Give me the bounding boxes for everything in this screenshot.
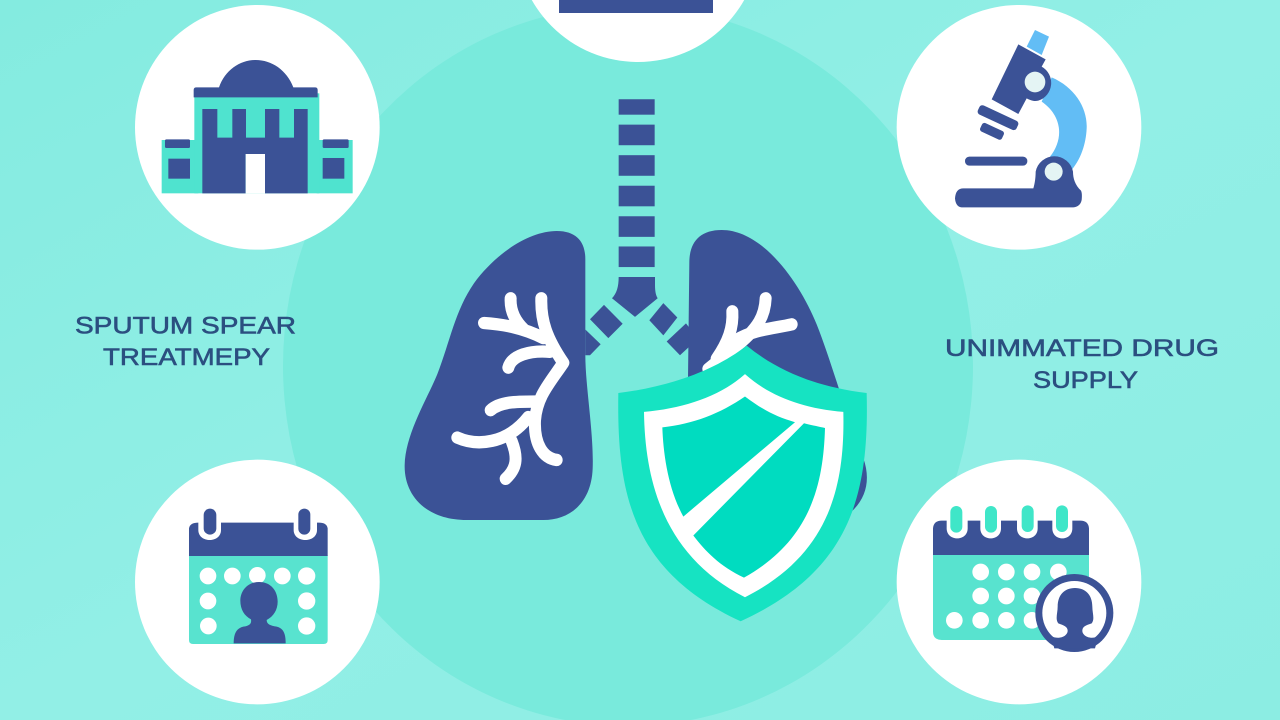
label: right: UNIMMATED DRUG <box>945 335 1219 362</box>
right lung <box>688 230 867 511</box>
panel: bottom-left calendar <box>135 460 380 704</box>
shield <box>618 346 867 621</box>
right lung airways <box>708 298 792 369</box>
icon: lungs with shield <box>405 99 867 621</box>
top circle: cropped icon <box>516 0 760 62</box>
left lung airways <box>457 298 563 479</box>
label: left: TREATMEPY <box>103 344 270 371</box>
panel: top-right microscope <box>897 5 1141 250</box>
label: right <box>945 335 1219 394</box>
icon: calendar with person <box>189 509 328 644</box>
icon: hospital building <box>162 60 353 193</box>
central circle backdrop <box>283 6 973 720</box>
icon: microscope <box>955 30 1087 207</box>
label: right: SUPPLY <box>1033 367 1138 394</box>
icon: spiral calendar with profile badge <box>933 505 1113 652</box>
profile silhouette <box>1051 588 1098 648</box>
panel: bottom-right calendar <box>897 460 1141 704</box>
trachea <box>585 99 689 355</box>
label: left: SPUTUM SPEAR <box>75 312 296 340</box>
left lung <box>405 231 593 520</box>
panel: top-left hospital <box>135 5 380 250</box>
label: left <box>75 312 296 371</box>
